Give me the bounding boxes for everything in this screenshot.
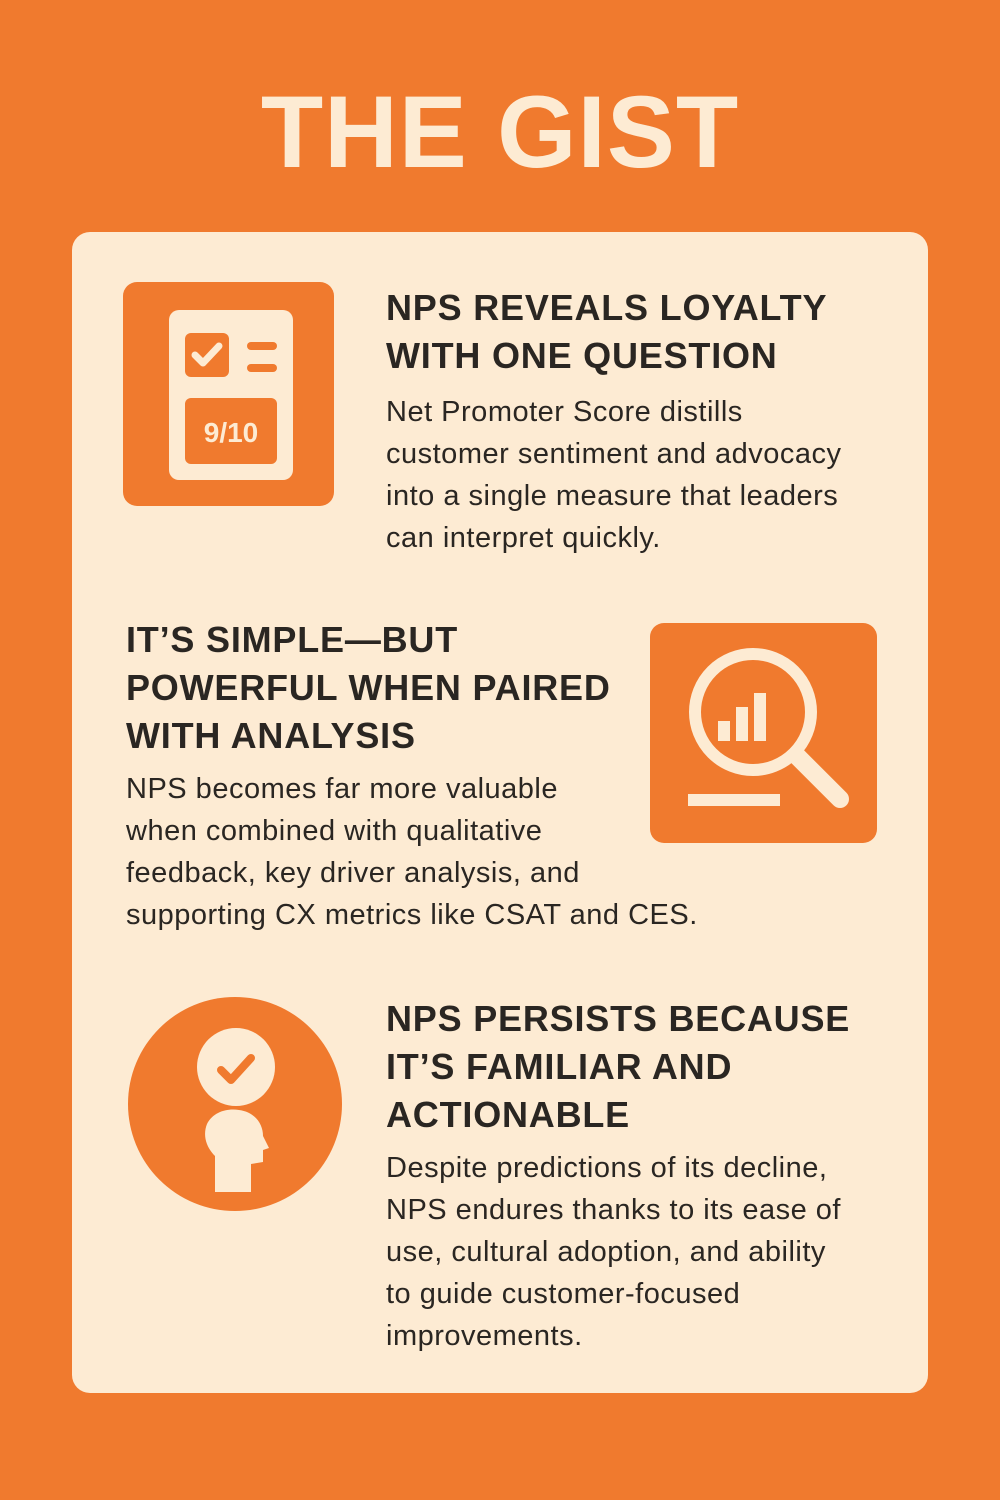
- text 1: into a single measure that leaders: [386, 480, 838, 512]
- text 3: use, cultural adoption, and ability: [386, 1236, 826, 1268]
- text 2: supporting CX metrics like CSAT and CES.: [126, 899, 698, 931]
- heading 1: NPS REVEALS LOYALTY: [386, 287, 827, 328]
- heading 1: [386, 287, 827, 376]
- text 3: NPS endures thanks to its ease of: [386, 1194, 841, 1226]
- panel: card: [72, 232, 928, 1393]
- text 1: Net Promoter Score distills: [386, 396, 743, 428]
- text 3: to guide customer-focused: [386, 1278, 740, 1310]
- text 2: when combined with qualitative: [126, 815, 542, 847]
- icon: magnifier chart: [650, 623, 877, 843]
- text 1: can interpret quickly.: [386, 522, 661, 554]
- icon: survey score card: 9/10: [204, 417, 258, 448]
- heading 2: [126, 619, 611, 756]
- title: THE GIST: [261, 75, 739, 189]
- heading 2: WITH ANALYSIS: [126, 715, 416, 756]
- text 1: [386, 396, 842, 554]
- text 1: customer sentiment and advocacy: [386, 438, 842, 470]
- text 3: improvements.: [386, 1320, 583, 1352]
- heading 1: WITH ONE QUESTION: [386, 335, 778, 376]
- text 2: feedback, key driver analysis, and: [126, 857, 580, 889]
- text 2: [126, 773, 698, 931]
- heading 2: IT’S SIMPLE—BUT: [126, 619, 458, 660]
- heading 3: IT’S FAMILIAR AND: [386, 1046, 732, 1087]
- icon: head with check: [128, 997, 342, 1211]
- heading 3: [386, 998, 850, 1135]
- text 2: NPS becomes far more valuable: [126, 773, 558, 805]
- icon: survey score card: [123, 282, 334, 506]
- heading 3: ACTIONABLE: [386, 1094, 630, 1135]
- text 3: Despite predictions of its decline,: [386, 1152, 827, 1184]
- heading 2: POWERFUL WHEN PAIRED: [126, 667, 611, 708]
- text 3: [386, 1152, 841, 1352]
- heading 3: NPS PERSISTS BECAUSE: [386, 998, 850, 1039]
